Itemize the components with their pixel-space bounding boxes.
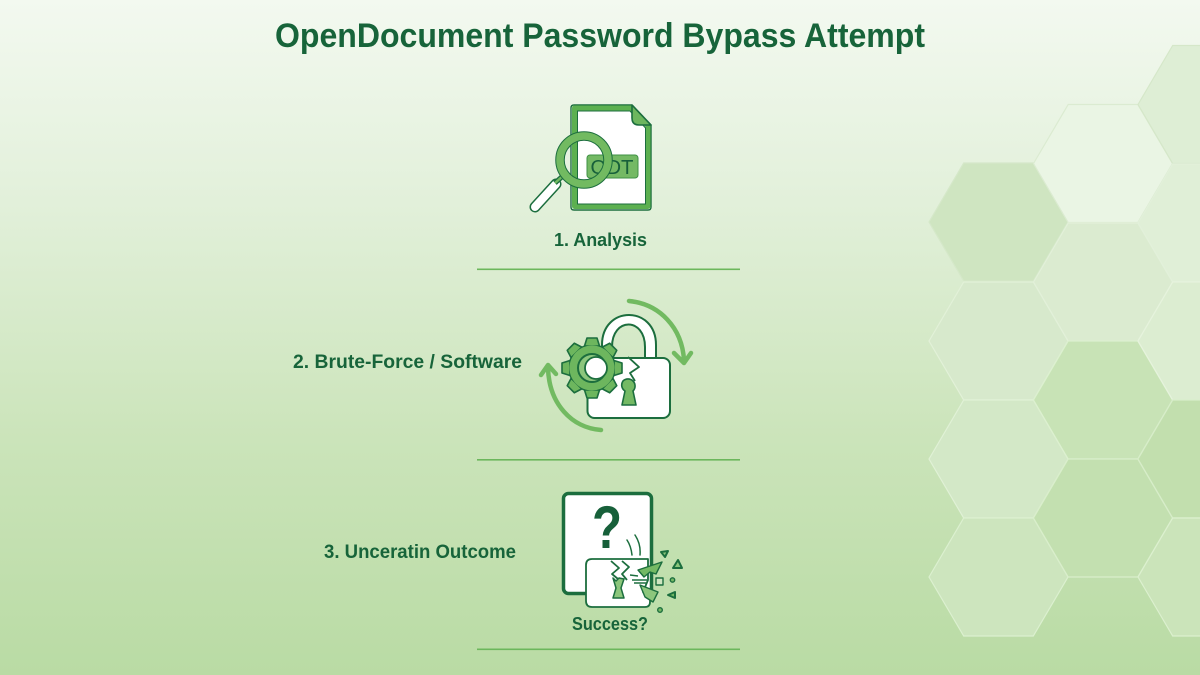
icon: ODT file under magnifying glass	[535, 105, 651, 210]
keyhole	[613, 578, 624, 598]
icon: padlock, gear and cycle arrows	[541, 301, 691, 430]
arrow: clockwise bottom	[541, 365, 601, 430]
broken lock body	[586, 559, 650, 607]
question mark: ?	[592, 494, 622, 561]
icon: question card and shattered lock	[564, 494, 682, 612]
shards	[638, 551, 682, 612]
ODT badge	[587, 155, 638, 178]
label: success: Success?	[572, 614, 648, 634]
crack	[628, 357, 639, 381]
hexagon pattern	[929, 46, 1200, 636]
shackle fragments	[627, 535, 640, 555]
title: OpenDocument Password Bypass Attempt	[275, 17, 925, 55]
divider 2	[477, 459, 740, 461]
keyhole	[622, 379, 636, 405]
shackle	[602, 315, 656, 362]
magnifier handle	[535, 184, 556, 207]
crack	[611, 561, 629, 580]
divider 3	[477, 648, 740, 650]
label: uncertain outcome: 3. Unceratin Outcome	[324, 542, 516, 563]
folded corner	[632, 105, 651, 125]
lock body	[588, 358, 670, 418]
question card	[564, 494, 652, 594]
gear	[562, 338, 622, 398]
hatch lines	[630, 575, 647, 583]
icon: ODT file under magnifying glass: ODT	[590, 157, 634, 179]
label: analysis: 1. Analysis	[554, 229, 647, 250]
magnifier lens	[560, 136, 608, 184]
arrow: clockwise top	[629, 301, 691, 363]
divider 1	[477, 268, 740, 270]
label: brute force: 2. Brute-Force / Software	[293, 352, 522, 373]
file sheet	[571, 105, 651, 210]
